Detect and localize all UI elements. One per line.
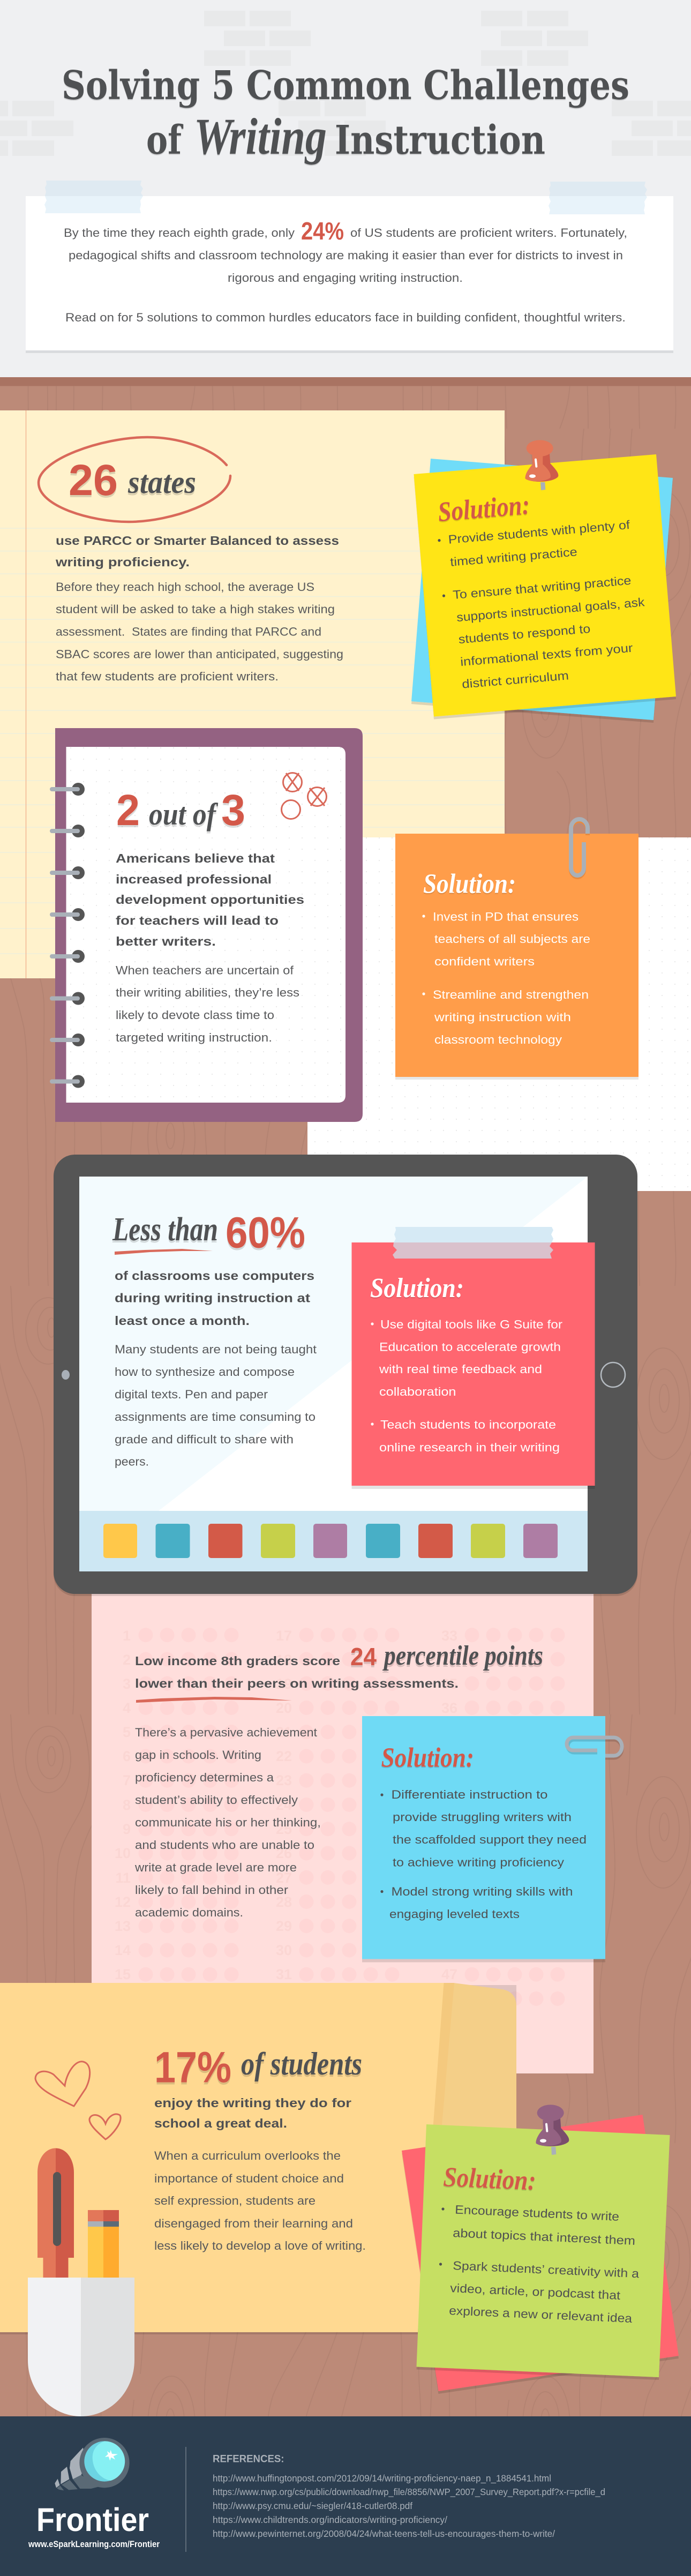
icon: big heart (35, 2062, 90, 2106)
answer numbers: 3 (123, 1676, 131, 1692)
icon: red push pin (525, 440, 558, 490)
brand name: www.eSparkLearning.com/Frontier (28, 2540, 160, 2549)
answer numbers: 10 (115, 1845, 131, 1861)
key statement: of classrooms use computers (115, 1269, 314, 1283)
body text: likely to devote class time to (116, 1008, 274, 1022)
stat: 26 states: states (127, 465, 196, 500)
references (213, 2454, 605, 2539)
body text: communicate his or her thinking, (135, 1816, 321, 1829)
solution 4 bullet list: the scaffolded support they need (393, 1833, 587, 1846)
answer numbers: 24 (276, 1797, 292, 1813)
stat: 24 percentile points (135, 1641, 543, 1690)
brush underline (136, 1697, 292, 1703)
solution 2 bullet list: Invest in PD that ensures (433, 910, 579, 924)
solution 4 bullet list: provide struggling writers with (393, 1810, 572, 1824)
references: http://www.pewinternet.org/2008/04/24/what-teens-tell-us-encourages-them-to-write/ (213, 2528, 555, 2539)
title: Instruction (335, 117, 545, 163)
home button (601, 1362, 625, 1387)
answer numbers: 20 (276, 1700, 292, 1716)
answer numbers: 2 (123, 1652, 131, 1668)
stat: 2 out of 3: 2 (116, 786, 140, 835)
icon: pencil (88, 2210, 119, 2278)
references: https://www.nwp.org/cs/public/download/nwp_file/8856/NWP_2007_Survey_Report.pdf?x-r=pcfile_d (213, 2487, 605, 2498)
answer numbers: 4 (123, 1700, 131, 1716)
body text: their writing abilities, they’re less (116, 986, 299, 999)
intro text: of US students are proficient writers. Fortunately, (350, 226, 627, 239)
solution 2 bullet list: classroom technology (434, 1033, 562, 1046)
panel: solution 4 blue note (362, 1716, 622, 1962)
solution 5 bullet list: about topics that interest them (453, 2226, 636, 2248)
key statement: for teachers will lead to (116, 913, 279, 927)
panel: pink bubble answer sheet (92, 1586, 594, 2073)
stat: less than 60% (112, 1209, 305, 1257)
solution 1 bullet list: Provide students with plenty of (448, 518, 631, 546)
answer numbers: 27 (276, 1870, 292, 1886)
icon: small heart (89, 2114, 121, 2139)
intro text: 24% (301, 217, 344, 245)
solution 3 bullet list: online research in their writing (379, 1441, 560, 1454)
stat: less than 60%: Less than (112, 1211, 218, 1248)
panel: challenge 3 tablet (54, 1155, 637, 1596)
panel: challenge 2 spiral notebook (50, 728, 363, 1122)
solution 2 bullet list: writing instruction with (434, 1010, 571, 1024)
answer numbers: 12 (115, 1894, 131, 1910)
body text: academic domains. (135, 1906, 243, 1919)
solution 1 bullet list: timed writing practice (449, 545, 578, 569)
hand-drawn oval (39, 437, 230, 522)
key statement: Americans believe that (116, 851, 275, 865)
answer numbers: 15 (115, 1966, 131, 1982)
references: https://www.childtrends.org/indicators/writing-proficiency/ (213, 2514, 447, 2525)
answer numbers: 17 (276, 1628, 292, 1644)
tape left (44, 181, 143, 213)
key statement (115, 1269, 314, 1328)
icon: pen (37, 2148, 74, 2278)
tape right (549, 182, 647, 214)
key statement: increased professional (116, 872, 272, 886)
solution 3 bullet list: Education to accelerate growth (379, 1341, 561, 1353)
body text: There’s a pervasive achievement (135, 1726, 318, 1739)
solution 1 bullet list: informational texts from your (460, 641, 634, 669)
solution 2 bullet list (422, 910, 590, 1046)
solution 1 bullet list (438, 518, 645, 691)
icon: pencil cup (28, 2278, 134, 2416)
body text: Many students are not being taught (115, 1343, 317, 1356)
body text: When a curriculum overlooks the (154, 2149, 341, 2162)
solution 3 bullet list: Use digital tools like G Suite for (380, 1318, 563, 1331)
answer numbers: 9 (123, 1821, 131, 1837)
body text: how to synthesize and compose (115, 1365, 295, 1379)
body text: proficiency determines a (135, 1771, 274, 1784)
stat: 17% of students: of students (241, 2046, 362, 2081)
key statement: use PARCC or Smarter Balanced to assess (56, 534, 339, 548)
panel: dotted white paper (307, 837, 691, 1191)
answer numbers: 11 (115, 1870, 131, 1886)
panel: solution 1 sticky notes (411, 440, 676, 720)
body text (56, 580, 343, 683)
intro text: By the time they reach eighth grade, only (64, 226, 295, 239)
heading: solution: Solution: (442, 2162, 537, 2197)
references: http://www.huffingtonpost.com/2012/09/14/writing-proficiency-naep_n_1884541.html (213, 2473, 551, 2484)
solution 4 bullet list: Differentiate instruction to (391, 1788, 547, 1801)
body text: assessment. States are finding that PARCC and (56, 625, 321, 639)
answer numbers: 47 (441, 1966, 457, 1982)
answer numbers: 23 (276, 1772, 292, 1788)
answer numbers: 8 (123, 1797, 131, 1813)
icon: tic tac toe marks (282, 773, 327, 819)
answer bubbles (135, 1623, 568, 2011)
answer numbers: 6 (123, 1748, 131, 1764)
body text (116, 963, 299, 1044)
stat: 24 percentile points: percentile points (382, 1641, 543, 1671)
body text: When teachers are uncertain of (116, 963, 294, 977)
solution 1 bullet list: district curriculum (461, 669, 569, 691)
body text: and students who are unable to (135, 1838, 314, 1852)
answer numbers: 14 (115, 1942, 131, 1958)
body text (154, 2149, 366, 2252)
panel: solution 5 sticky notes (402, 2105, 679, 2391)
answer numbers: 28 (276, 1894, 292, 1910)
stat: 2 out of 3: 3 (221, 786, 245, 835)
body text: student will be asked to take a high stakes writing (56, 602, 335, 616)
key statement: enjoy the writing they do for (154, 2096, 351, 2110)
answer numbers: 21 (276, 1724, 292, 1740)
solution 1 bullet list: supports instructional goals, ask (456, 595, 645, 624)
background: wood desk (0, 377, 691, 2416)
app icons (103, 1524, 558, 1558)
title (62, 63, 629, 165)
solution 3 bullet list (371, 1318, 563, 1454)
answer numbers: 13 (115, 1918, 131, 1934)
body text: gap in schools. Writing (135, 1748, 261, 1762)
stat: 24 percentile points: 24 (350, 1643, 377, 1671)
key statement (154, 2096, 351, 2130)
intro text (64, 217, 627, 324)
icon: purple push pin (536, 2105, 569, 2155)
title: Writing (194, 108, 327, 165)
panel: challenge 5 manila folder (0, 1983, 516, 2416)
intro text: rigorous and engaging writing instruction. (228, 271, 463, 284)
answer numbers: 30 (276, 1942, 292, 1958)
solution 1 bullet list: To ensure that writing practice (452, 574, 632, 602)
stat: 24 percentile points: lower than their peers on writing assessments. (135, 1676, 459, 1690)
brush underline (115, 1249, 213, 1255)
solution 5 bullet list: Encourage students to write (455, 2203, 620, 2223)
title: of (146, 117, 183, 163)
key statement: writing proficiency. (55, 555, 190, 569)
answer numbers: 18 (276, 1652, 292, 1668)
heading: solution: Solution: (381, 1742, 474, 1773)
panel: challenge 1 lined paper (0, 410, 505, 978)
answer numbers: 22 (276, 1748, 292, 1764)
stat: 24 percentile points: Low income 8th graders score (135, 1654, 340, 1668)
answer numbers: 29 (276, 1918, 292, 1934)
key statement (55, 534, 339, 569)
body text: SBAC scores are lower than anticipated, suggesting (56, 647, 343, 661)
references: REFERENCES: (213, 2454, 284, 2465)
body text: likely to fall behind in other (135, 1883, 289, 1897)
solution 4 bullet list (380, 1788, 587, 1921)
key statement: during writing instruction at (115, 1291, 310, 1305)
heading: solution: Solution: (370, 1273, 464, 1304)
panel: solution 3 red note (351, 1227, 595, 1489)
icon: notebook rings (50, 783, 85, 1088)
body text: assignments are time consuming to (115, 1410, 316, 1424)
heading: solution: Solution: (423, 869, 516, 899)
brand name: Frontier (36, 2502, 149, 2538)
panel: footer (0, 2416, 691, 2576)
solution 5 bullet list: explores a new or relevant idea (449, 2304, 633, 2325)
stat: 17% of students (154, 2043, 362, 2092)
body text (115, 1343, 317, 1468)
body text: that few students are proficient writers. (56, 670, 279, 683)
answer numbers: 19 (276, 1676, 292, 1692)
solution 2 bullet list: teachers of all subjects are (434, 932, 590, 946)
icon: paperclip (567, 1738, 622, 1758)
answer numbers: 7 (123, 1772, 131, 1788)
heading: solution: Solution: (437, 490, 531, 528)
stat: 26 states (69, 456, 196, 505)
key statement: school a great deal. (154, 2116, 287, 2130)
background: brick wall header (0, 0, 691, 377)
answer numbers: 1 (123, 1628, 131, 1644)
icon: Frontier telescope logo (55, 2438, 130, 2490)
body text (134, 1726, 321, 1919)
answer numbers: 26 (276, 1845, 292, 1861)
solution 5 bullet list: video, article, or podcast that (450, 2281, 621, 2302)
solution 4 bullet list: engaging leveled texts (389, 1907, 520, 1921)
solution 2 bullet list: confident writers (434, 955, 535, 968)
icon: paperclip (571, 819, 588, 877)
body text: Before they reach high school, the average US (56, 580, 314, 594)
body text: digital texts. Pen and paper (115, 1388, 268, 1401)
key statement: development opportunities (116, 893, 304, 907)
stat: 17% of students: 17% (154, 2043, 231, 2092)
references: http://www.psy.cmu.edu/~siegler/418-cutler08.pdf (213, 2500, 412, 2511)
solution 5 bullet list (439, 2203, 640, 2325)
body text: disengaged from their learning and (154, 2217, 353, 2230)
stat: 2 out of 3 (116, 786, 245, 835)
panel: intro card (26, 181, 673, 353)
answer numbers: 5 (123, 1724, 131, 1740)
body text: less likely to develop a love of writing. (154, 2239, 366, 2252)
solution 2 bullet list: Streamline and strengthen (433, 988, 589, 1001)
solution 3 bullet list: with real time feedback and (379, 1362, 542, 1376)
key statement (116, 851, 304, 948)
body text: targeted writing instruction. (116, 1031, 272, 1044)
camera dot (62, 1370, 70, 1380)
body text: grade and difficult to share with (115, 1433, 294, 1446)
answer numbers: 33 (441, 1628, 457, 1644)
body text: self expression, students are (154, 2194, 316, 2207)
answer numbers (115, 1628, 457, 1982)
solution 3 bullet list: Teach students to incorporate (380, 1418, 556, 1432)
intro text: Read on for 5 solutions to common hurdles educators face in building confident, thoughtful writers. (65, 311, 626, 324)
answer numbers: 36 (441, 1700, 457, 1716)
panel: solution 2 orange note (395, 819, 639, 1080)
answer numbers: 34 (441, 1652, 457, 1668)
key statement: least once a month. (115, 1314, 250, 1328)
body text: importance of student choice and (154, 2172, 344, 2185)
intro text: pedagogical shifts and classroom technology are making it easier than ever for districts to invest in (69, 249, 623, 262)
solution 4 bullet list: to achieve writing proficiency (393, 1856, 565, 1869)
body text: student’s ability to effectively (135, 1793, 298, 1807)
body text: peers. (115, 1455, 149, 1468)
stat: 2 out of 3: out of (149, 797, 219, 832)
answer numbers: 35 (441, 1676, 457, 1692)
solution 5 bullet list: Spark students’ creativity with a (453, 2259, 640, 2280)
key statement: better writers. (116, 934, 216, 948)
answer numbers: 31 (276, 1966, 292, 1982)
stat: less than 60%: 60% (226, 1209, 305, 1257)
body text: write at grade level are more (134, 1861, 297, 1874)
solution 1 bullet list: students to respond to (458, 622, 591, 646)
solution 3 bullet list: collaboration (379, 1385, 456, 1398)
solution 4 bullet list: Model strong writing skills with (391, 1885, 573, 1898)
answer numbers: 25 (276, 1821, 292, 1837)
tape (393, 1227, 553, 1259)
stat: 26 states: 26 (69, 456, 118, 505)
